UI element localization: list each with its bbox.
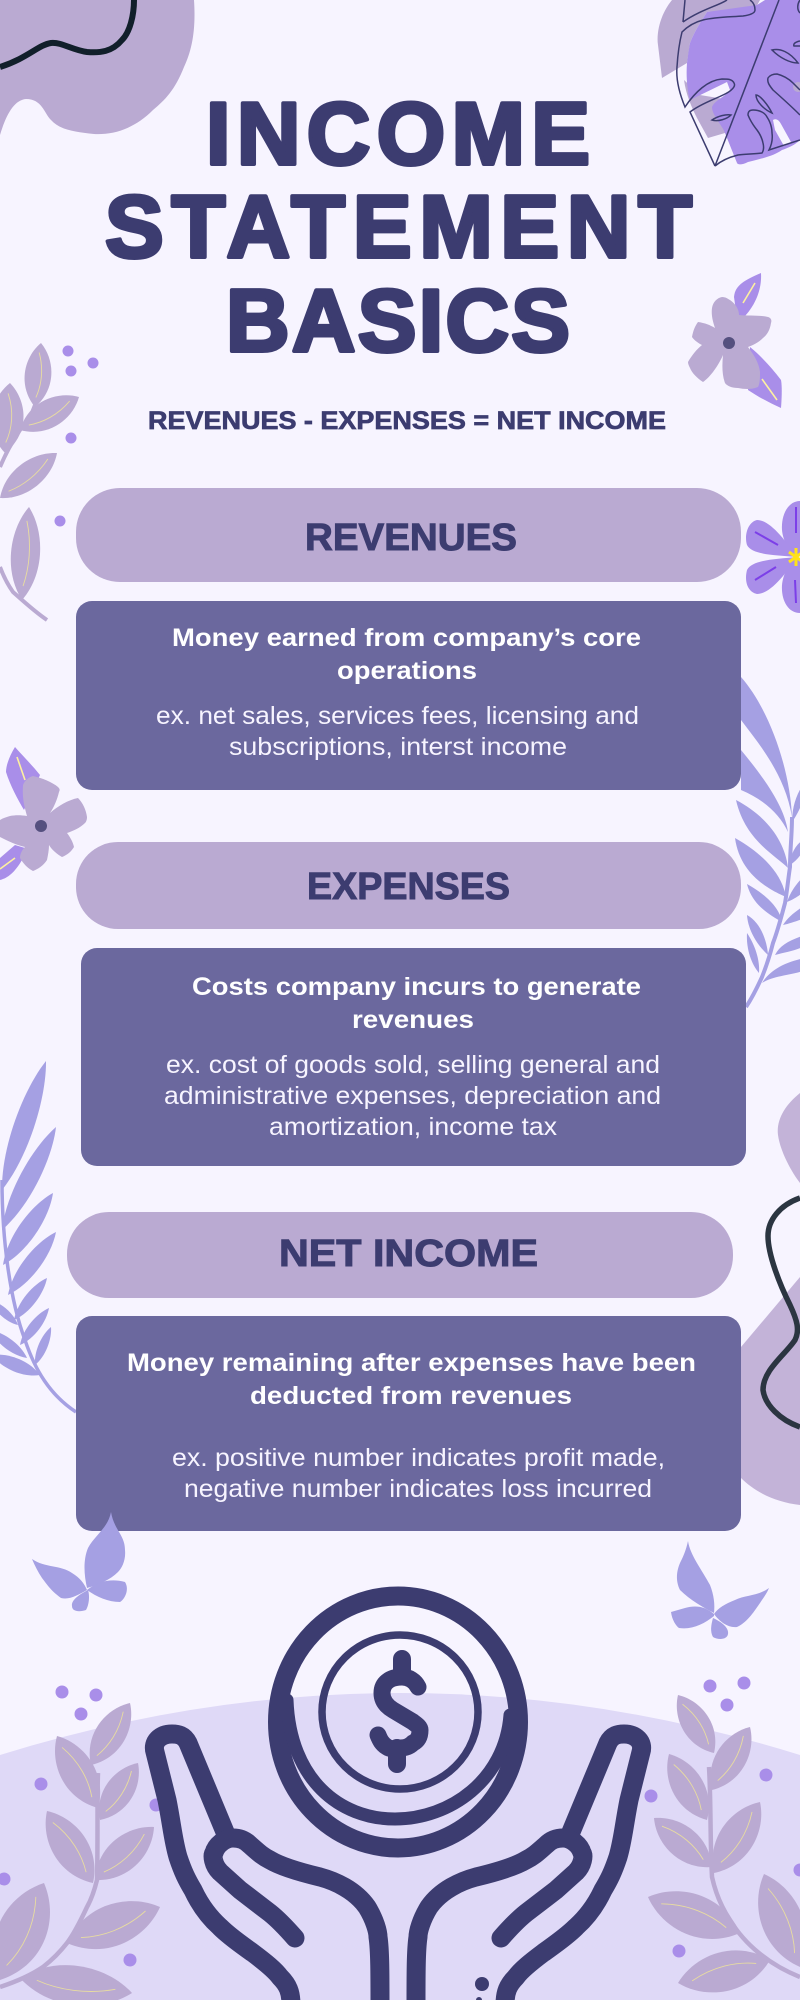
icon: right hand bbox=[416, 1734, 642, 2000]
panel: expenses description: revenues bbox=[352, 1006, 474, 1034]
icon: coin bbox=[278, 1596, 518, 1848]
panel: net income description: deducted from revenues bbox=[250, 1382, 572, 1410]
panel: net income heading bbox=[67, 1212, 733, 1298]
panel: expenses description: amortization, income tax bbox=[269, 1113, 558, 1141]
icon: butterfly right bbox=[671, 1541, 769, 1639]
panel: net income description: Money remaining after expenses have been bbox=[127, 1349, 696, 1377]
icon: butterfly left bbox=[32, 1512, 127, 1611]
title bbox=[105, 84, 692, 370]
blob: top left bbox=[0, 0, 195, 135]
icon: fern left bbox=[0, 1058, 76, 1412]
icon: branch bottom left bbox=[0, 1686, 167, 2000]
icon: flower left bbox=[0, 747, 87, 880]
panel: expenses heading bbox=[76, 842, 741, 929]
panel: net income heading: NET INCOME bbox=[279, 1233, 538, 1275]
icon: purple flower right bbox=[746, 501, 800, 613]
panel: net income description: negative number indicates loss incurred bbox=[184, 1475, 652, 1503]
icon: branch top left bbox=[0, 342, 99, 620]
panel: expenses description bbox=[81, 948, 746, 1166]
panel: net income description bbox=[76, 1316, 741, 1531]
panel: expenses description: Costs company incurs to generate bbox=[192, 973, 641, 1001]
panel: revenues description: subscriptions, interst income bbox=[229, 733, 567, 761]
icon: dollar sign bbox=[378, 1659, 420, 1764]
panel: expenses heading: EXPENSES bbox=[307, 866, 510, 908]
title: STATEMENT bbox=[105, 177, 692, 276]
panel: expenses description: ex. cost of goods sold, selling general and bbox=[166, 1051, 660, 1079]
icon: monstera leaf bbox=[658, 0, 800, 166]
icon: fern right bbox=[735, 677, 800, 1007]
icon: branch bottom right bbox=[641, 1676, 800, 2000]
blob: right side bbox=[741, 1093, 800, 1505]
panel: revenues description bbox=[76, 601, 741, 790]
panel: revenues heading bbox=[76, 488, 741, 582]
ground arc bbox=[0, 1693, 800, 2000]
subtitle: formula: REVENUES - EXPENSES = NET INCOME bbox=[148, 407, 666, 435]
title: BASICS bbox=[226, 271, 570, 370]
panel: net income description: ex. positive number indicates profit made, bbox=[172, 1444, 665, 1472]
panel: revenues description: ex. net sales, services fees, licensing and bbox=[156, 702, 639, 730]
icon: flower top right bbox=[688, 273, 782, 408]
panel: expenses description: administrative expenses, depreciation and bbox=[164, 1082, 661, 1110]
title: INCOME bbox=[206, 84, 590, 183]
icon: hands bbox=[154, 1734, 642, 2000]
panel: revenues heading: REVENUES bbox=[305, 517, 517, 559]
panel: revenues description: operations bbox=[337, 657, 477, 685]
panel: revenues description: Money earned from company’s core bbox=[172, 624, 641, 652]
icon: left hand bbox=[154, 1734, 380, 2000]
